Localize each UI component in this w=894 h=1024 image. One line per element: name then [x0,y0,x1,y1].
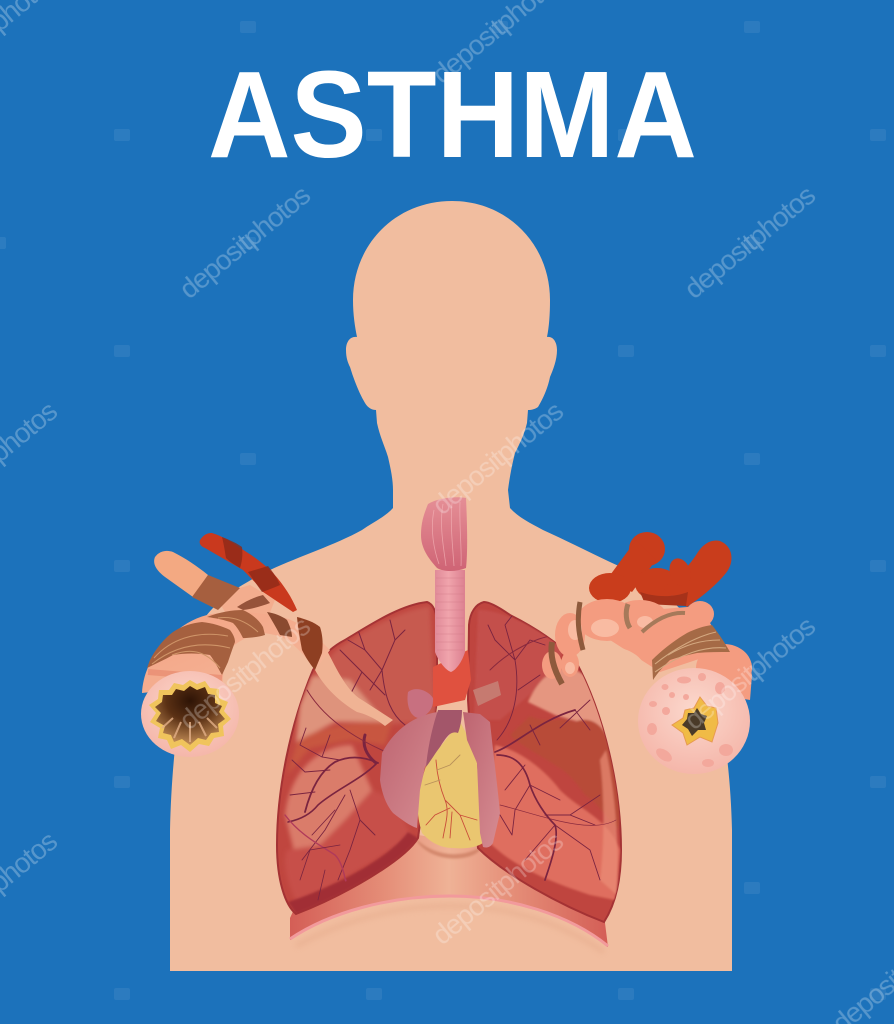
body silhouette [170,201,732,971]
watermarks: depositphotos [678,179,821,305]
watermarks: depositphotos [173,179,316,305]
right airway [542,532,752,774]
pericardium left flap [380,712,437,828]
alveolus lumen [682,708,707,736]
peach bulbs [542,599,752,700]
gap below peach tube [600,642,652,690]
watermarks: depositphotos [678,610,821,736]
alveolus star ring [672,697,718,745]
upper branch muscle [192,575,240,610]
pericardium centre [426,710,462,767]
great vessels [433,650,471,707]
red branch [200,533,297,612]
right lung pale area [527,668,604,735]
upper peach branch [154,551,208,597]
right lung [468,602,621,922]
pericardium right flap [463,712,500,848]
watermarks: depositphotos [426,825,569,951]
left lung pale area [296,676,385,742]
title: ASTHMA [208,47,697,184]
right airway highlights [565,616,653,674]
diaphragm [290,835,608,952]
airway cross-section [141,671,239,757]
watermarks: depositphotos [173,610,316,736]
main bronchus [142,612,330,693]
muscle bands [147,595,323,678]
left lung upper tissue [310,606,436,725]
trachea and larynx [407,497,501,718]
heart vessels [425,755,477,840]
left lung [277,602,437,914]
right lung vessels [488,612,616,880]
right lung lower tissue [485,745,620,900]
right muscle bands [551,602,730,684]
red alveoli [589,532,732,607]
watermarks: depositphotos [426,395,569,521]
right lung upper tissue [474,610,565,720]
left airway: thin tube into lung [315,643,393,726]
alveolus cross-section [638,668,750,774]
left airway [141,533,330,757]
left lung vessels [284,620,406,900]
airway lumen [155,686,225,745]
heart [418,722,483,848]
larynx [421,497,467,571]
trachea tube [435,570,465,672]
right lung dark patch [521,718,620,824]
left lung lower tissue [285,745,372,855]
